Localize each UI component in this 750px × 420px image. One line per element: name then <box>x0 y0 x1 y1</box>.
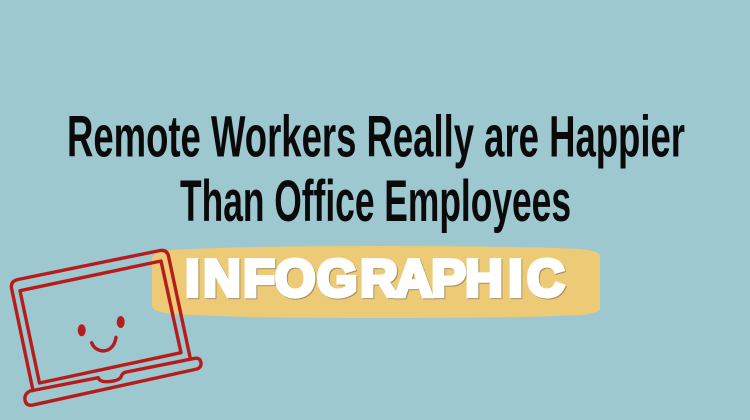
smile <box>92 337 116 351</box>
banner: infographic label <box>152 246 600 318</box>
icon: smiling laptop <box>11 250 201 405</box>
title <box>67 104 685 234</box>
eyes <box>78 316 125 336</box>
banner: infographic label: INFOGRAPHIC <box>185 250 565 308</box>
banner: infographic label: INFOGRAPHIC <box>186 251 566 309</box>
